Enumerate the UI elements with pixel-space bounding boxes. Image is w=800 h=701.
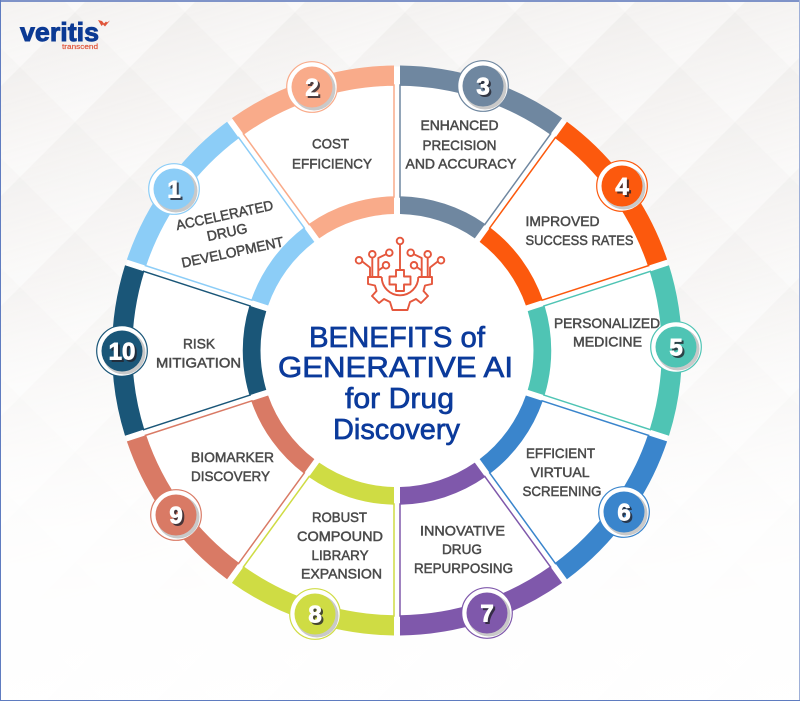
panel: 8 robust compound library expansion (232, 463, 394, 639)
panel: 4 improved success rates (465, 122, 698, 357)
panel: 5 personalized medicine (505, 265, 719, 473)
label 9: DISCOVERY (191, 468, 271, 484)
panel: 7 innovative drug repurposing (329, 443, 562, 678)
label 5: MEDICINE (573, 334, 642, 350)
badge 1: 1 (167, 176, 181, 204)
title: benefits of generative AI for drug discovery: for Drug (345, 383, 454, 415)
label 8: LIBRARY (312, 547, 369, 563)
ring segment 3 (400, 66, 562, 238)
label 8: ROBUST (312, 509, 367, 525)
ring segment 2 (232, 23, 465, 258)
panel: 6 efficient virtual screening (453, 388, 667, 596)
panel: 10 risk mitigation (75, 228, 289, 436)
icon: gear with circuit and medical cross (356, 238, 444, 310)
title: benefits of generative AI for drug discovery: GENERATIVE AI (278, 352, 513, 384)
label 9: BIOMARKER (191, 449, 274, 465)
label 8: EXPANSION (301, 566, 382, 582)
ring segment 5 (505, 265, 719, 473)
wheel base disc (113, 66, 681, 634)
label 7: REPURPOSING (414, 560, 513, 576)
label 4: SUCCESS RATES (526, 232, 634, 248)
label 7: INNOVATIVE (420, 522, 505, 538)
label 2: EFFICIENCY (292, 156, 373, 172)
label 5 (554, 315, 660, 350)
badge 7 (462, 588, 512, 638)
badge 8 (290, 589, 340, 639)
label 6: EFFICIENT (526, 445, 595, 461)
badge 9: 9 (169, 502, 183, 530)
logo: veritis transcend: veritis (20, 17, 99, 47)
ring segment 8 (232, 463, 394, 635)
label 3: PRECISION (422, 137, 496, 153)
label 7 (414, 522, 513, 576)
label 7: DRUG (442, 541, 482, 557)
badge 2: 2 (305, 74, 319, 102)
title: benefits of generative AI for drug discovery (278, 322, 513, 446)
ring segment 6 (453, 388, 667, 596)
badge 4 (597, 161, 647, 211)
ring segment 4 (465, 122, 698, 357)
title: benefits of generative AI for drug discovery: BENEFITS of (309, 322, 486, 354)
ring segment 1 (127, 105, 341, 313)
label 4: IMPROVED (526, 213, 600, 229)
badge 7: 7 (480, 600, 494, 628)
badge 9 (151, 490, 201, 540)
label 1 (174, 197, 285, 271)
panel: 3 enhanced precision and accuracy (400, 61, 562, 238)
label 10: RISK (183, 336, 216, 352)
label 10 (156, 336, 241, 370)
label 6: VIRTUAL (530, 464, 590, 480)
badge 10 (97, 326, 147, 376)
badge 3 (458, 61, 508, 111)
label 4 (526, 213, 634, 248)
label 9 (191, 449, 274, 484)
label 3 (406, 117, 517, 172)
label 2 (292, 136, 373, 172)
badge 4: 4 (615, 174, 629, 200)
label 1: ACCELERATED (174, 197, 275, 233)
badge 1 (149, 164, 199, 214)
ring segment 9 (96, 344, 329, 579)
label 6: SCREENING (522, 483, 602, 499)
title: benefits of generative AI for drug discovery: Discovery (333, 414, 460, 446)
label 8: COMPOUND (297, 528, 383, 544)
logo: veritis transcend: transcend (62, 42, 98, 51)
badge 5: 5 (669, 334, 683, 362)
badge 6 (599, 487, 649, 537)
label 1: DRUG (205, 220, 249, 244)
label 8 (297, 509, 383, 582)
label 2: COST (312, 136, 349, 152)
panel: 2 cost efficiency (232, 23, 465, 258)
panel: 9 biomarker discovery (96, 344, 329, 579)
label 3: ENHANCED (420, 117, 498, 133)
ring segment 7 (329, 443, 562, 678)
badge 10: 10 (109, 338, 135, 366)
badge 8: 8 (308, 602, 322, 628)
badge 2 (287, 62, 337, 112)
badge 6: 6 (617, 500, 631, 526)
label 3: AND ACCURACY (406, 156, 517, 172)
label 5: PERSONALIZED (554, 315, 660, 331)
label 1: DEVELOPMENT (180, 233, 285, 271)
label 10: MITIGATION (156, 354, 241, 370)
panel: 1 accelerated drug development (127, 105, 341, 313)
label 6 (522, 445, 602, 499)
badge 5 (651, 322, 701, 372)
ring segment 10 (75, 228, 289, 436)
badge 3: 3 (476, 74, 490, 100)
